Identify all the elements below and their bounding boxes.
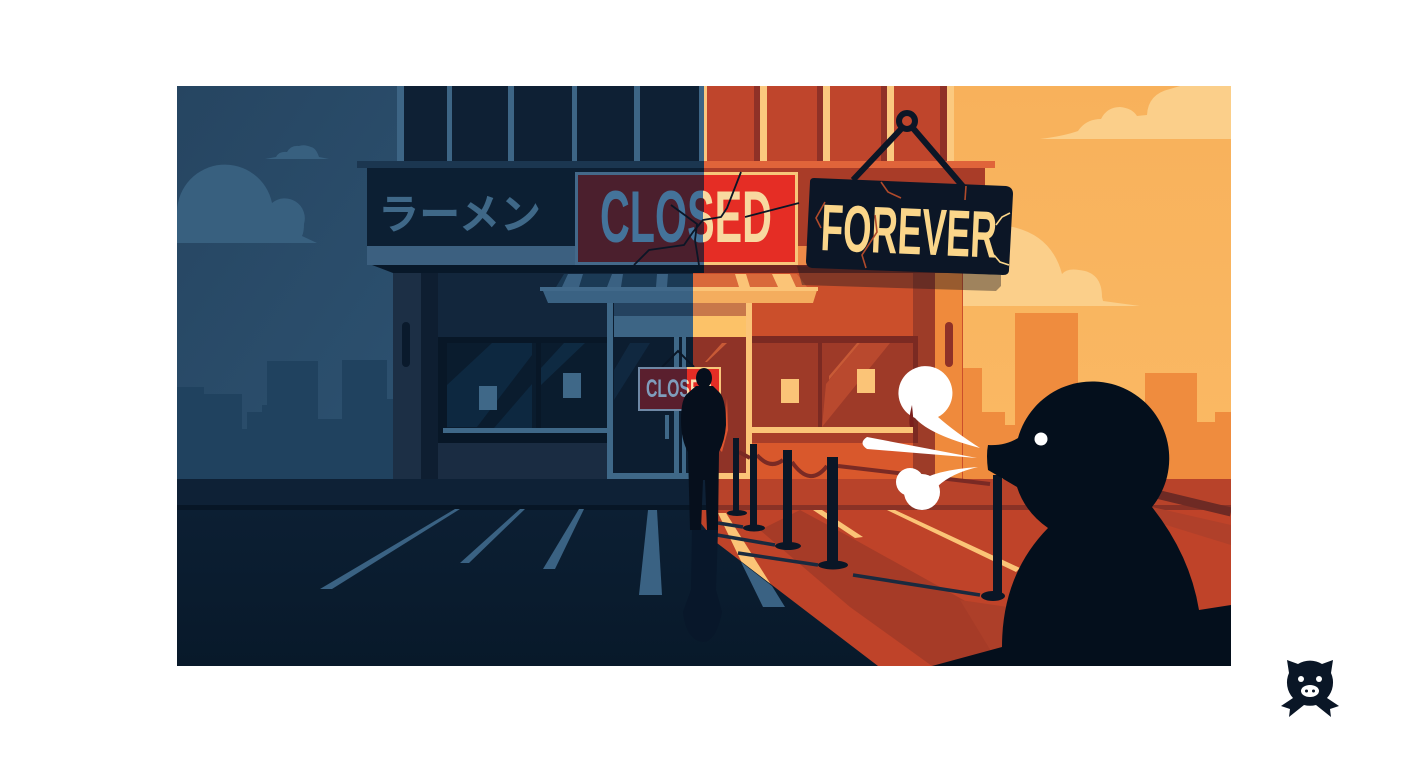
stanchions xyxy=(727,438,1005,601)
forever sign xyxy=(806,178,1013,275)
night city skyline xyxy=(177,360,400,480)
forever sign shadow xyxy=(797,266,1001,291)
parking lot lines, sunset side xyxy=(718,510,1020,584)
pavement xyxy=(177,479,1231,510)
cornice and fascia xyxy=(357,161,995,273)
sunset city skyline xyxy=(940,313,1231,480)
stanchion shadows xyxy=(717,523,980,595)
pig silhouette watching xyxy=(932,381,1231,666)
closed sign: CLOSED xyxy=(600,177,772,258)
puff: upper steam xyxy=(898,366,980,448)
upper storey, sunset side xyxy=(704,86,954,166)
entrance door xyxy=(607,303,752,480)
panel: night sky xyxy=(177,86,397,429)
glass cracks xyxy=(634,172,799,265)
sunset clouds xyxy=(960,86,1231,306)
upper storey, night side xyxy=(397,86,704,166)
left window xyxy=(438,337,608,443)
parking lot lines, night side xyxy=(320,509,785,607)
night clouds xyxy=(177,145,329,243)
illustration: closed ramen shop, split night and sunset scene xyxy=(177,86,1231,666)
parking lot, sunset side xyxy=(680,510,1231,666)
logo: pig head badge xyxy=(1281,660,1339,717)
awning xyxy=(540,274,818,303)
door closed sign xyxy=(638,351,721,411)
puff: lower steam xyxy=(896,467,978,510)
light shafts on the parking lot xyxy=(760,507,1231,666)
ground floor wall, sunset side xyxy=(693,270,963,480)
ramen shop name: ラーメン xyxy=(378,191,541,238)
hanging hardware xyxy=(853,113,966,190)
door closed sign: CLOSED xyxy=(646,375,712,403)
right window xyxy=(752,336,918,443)
parking lot, night side xyxy=(177,510,878,666)
forever sign: FOREVER xyxy=(819,190,998,272)
puff: straight steam xyxy=(862,437,977,458)
rope barrier xyxy=(739,452,1231,512)
person silhouette and reflection xyxy=(681,368,728,544)
panel: sunset sky xyxy=(954,86,1231,425)
closed sign xyxy=(575,172,798,265)
ground floor wall, night side xyxy=(393,270,703,480)
